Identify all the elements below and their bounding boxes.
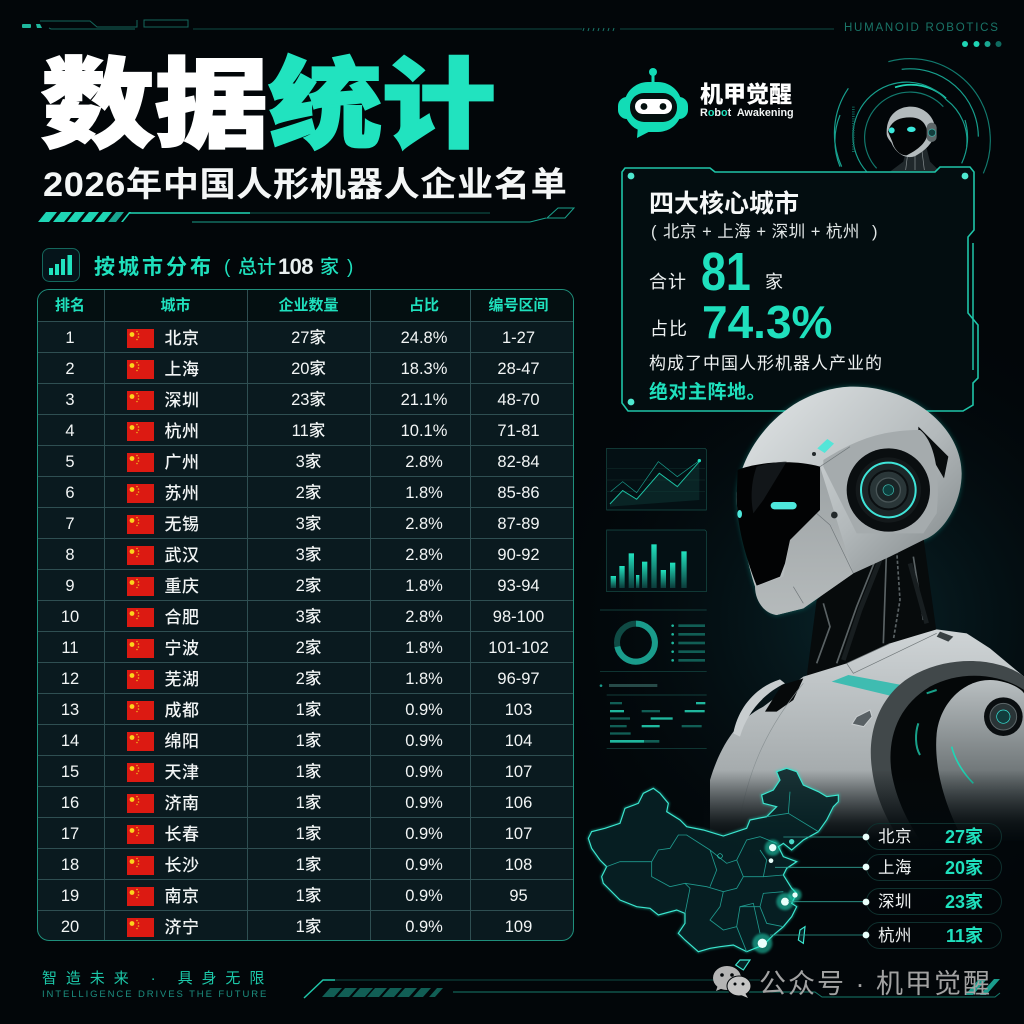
share label: 占比 — [650, 319, 688, 339]
watermark — [713, 966, 992, 999]
legend 深圳 — [866, 888, 1002, 915]
row 19 — [38, 880, 573, 911]
row 16: 1家 — [296, 794, 321, 812]
row 4: 杭州 — [164, 422, 200, 441]
row 5: 5 — [65, 453, 75, 471]
legend 杭州: 11家 — [946, 926, 983, 946]
row 13 — [38, 694, 573, 725]
row 7 — [38, 508, 573, 539]
legend 深圳: 23家 — [945, 892, 983, 912]
icon: robot logo — [618, 68, 688, 138]
row 15 — [38, 756, 573, 787]
row 6 — [38, 477, 573, 508]
heading total — [224, 254, 353, 279]
row 3: 21.1% — [401, 391, 447, 409]
row 8: 2.8% — [405, 546, 443, 564]
icon: bar chart — [42, 248, 80, 282]
row 11: 11 — [61, 639, 79, 657]
row 12: 1.8% — [405, 670, 443, 688]
label: humanoid robotics: HUMANOID ROBOTICS — [844, 22, 1000, 34]
section heading: by city — [42, 248, 353, 282]
row 12 — [38, 663, 573, 694]
row 1 — [38, 322, 573, 353]
legend 上海: 20家 — [945, 858, 983, 878]
slogan: 智造未来 · 具身无限 — [42, 970, 273, 987]
row 15: 15 — [61, 763, 79, 781]
title underline decoration — [38, 208, 575, 222]
panel: core cities — [621, 166, 979, 412]
row 1: 1 — [65, 329, 75, 347]
row 17: 1家 — [296, 825, 321, 843]
panel frame — [621, 166, 979, 412]
row 20: 109 — [505, 918, 532, 936]
table header — [38, 290, 573, 322]
row 14: 104 — [505, 732, 532, 750]
total label: 合计 — [649, 272, 687, 292]
row 19: 0.9% — [405, 887, 443, 905]
mini charts — [600, 448, 707, 749]
row 14: 绵阳 — [164, 732, 200, 751]
total number: 81 — [701, 242, 751, 302]
footer decoration — [304, 979, 1000, 998]
row 9: 1.8% — [405, 577, 443, 595]
row 18: 长沙 — [164, 856, 200, 875]
row 13: 13 — [61, 701, 79, 719]
robot glow — [737, 387, 962, 615]
row 8: 8 — [65, 546, 75, 564]
row 6: 1.8% — [405, 484, 443, 502]
row 4 — [38, 415, 573, 446]
donut chart — [600, 610, 707, 672]
row 9: 2家 — [296, 577, 321, 595]
row 11: 2家 — [296, 639, 321, 657]
row 8: 武汉 — [164, 546, 200, 565]
row 7: 无锡 — [164, 515, 200, 534]
table header: 编号区间 — [488, 297, 548, 314]
legend 上海 — [866, 854, 1002, 881]
icon: wechat — [713, 966, 750, 998]
row 7: 87-89 — [497, 515, 540, 533]
row 16 — [38, 787, 573, 818]
row 8 — [38, 539, 573, 570]
row 3 — [38, 384, 573, 415]
logo subtitle: Robot Awakening — [700, 107, 794, 119]
row 11 — [38, 632, 573, 663]
row 5: 3家 — [296, 453, 321, 471]
row 9: 重庆 — [164, 577, 200, 596]
row 8: 3家 — [296, 546, 321, 564]
line chart — [607, 448, 706, 510]
row 10: 98-100 — [493, 608, 544, 626]
row 2: 28-47 — [497, 360, 540, 378]
row 13: 1家 — [296, 701, 321, 719]
row 10: 2.8% — [405, 608, 443, 626]
panel city list: ) — [872, 223, 878, 241]
row 20 — [61, 918, 532, 937]
row 1: 1-27 — [502, 329, 535, 347]
legend 北京: 北京 — [878, 828, 912, 846]
row 11: 1.8% — [405, 639, 443, 657]
row 2: 18.3% — [401, 360, 447, 378]
heading total: ( — [224, 257, 230, 278]
row 12: 12 — [61, 670, 79, 688]
share number: 74.3% — [702, 296, 832, 348]
row 16: 16 — [61, 794, 79, 812]
legend 北京 — [866, 823, 1002, 850]
row 18: 0.9% — [405, 856, 443, 874]
row 1: 27家 — [291, 329, 326, 347]
row 20: 20 — [61, 918, 79, 936]
row 1: 北京 — [164, 329, 200, 348]
row 12: 芜湖 — [164, 670, 200, 689]
row 18 — [38, 849, 573, 880]
row 17: 0.9% — [405, 825, 443, 843]
row 13: 103 — [505, 701, 532, 719]
small robot with rings — [834, 58, 991, 174]
row 4: 71-81 — [497, 422, 540, 440]
row 16: 0.9% — [405, 794, 443, 812]
row 2 — [38, 353, 573, 384]
row 16: 106 — [505, 794, 532, 812]
panel highlight: 绝对主阵地。 — [649, 382, 766, 403]
panel description: 构成了中国人形机器人产业的 — [649, 354, 883, 373]
panel city list: 北京 + 上海 + 深圳 + 杭州 — [663, 223, 860, 241]
row 20: 0.9% — [405, 918, 443, 936]
row 5: 广州 — [164, 453, 200, 472]
row 7: 3家 — [296, 515, 321, 533]
robot shoulder joint — [871, 661, 1024, 840]
row 17 — [38, 818, 573, 849]
city legend — [862, 823, 1002, 949]
slogan english: INTELLIGENCE DRIVES THE FUTURE — [42, 989, 268, 1000]
table header: 排名 — [55, 297, 85, 314]
logo name: 机甲觉醒 — [700, 81, 792, 107]
row 17: 长春 — [164, 825, 200, 844]
row 15: 0.9% — [405, 763, 443, 781]
row 20: 1家 — [296, 918, 321, 936]
logo — [618, 68, 794, 138]
row 7: 2.8% — [405, 515, 443, 533]
heading total: 总计 — [238, 257, 276, 278]
robot torso — [710, 629, 1024, 840]
row 15: 天津 — [164, 763, 200, 782]
row 2: 20家 — [291, 360, 326, 378]
legend 深圳: 深圳 — [878, 893, 912, 911]
row 6: 6 — [65, 484, 75, 502]
legend 杭州 — [866, 922, 1002, 949]
row 6: 2家 — [296, 484, 321, 502]
robot neck — [807, 537, 937, 677]
row 20: 济宁 — [164, 918, 200, 937]
table: city distribution — [37, 289, 574, 941]
row 17: 107 — [505, 825, 532, 843]
row 5: 2.8% — [405, 453, 443, 471]
row 12: 2家 — [296, 670, 321, 688]
row 1: 24.8% — [401, 329, 447, 347]
row 18: 18 — [61, 856, 79, 874]
row 9: 93-94 — [497, 577, 540, 595]
table header: 占比 — [409, 297, 439, 314]
row 3: 48-70 — [497, 391, 540, 409]
total unit: 家 — [765, 272, 783, 292]
row 5: 82-84 — [497, 453, 540, 471]
row 10 — [38, 601, 573, 632]
row 14 — [38, 725, 573, 756]
row 10: 3家 — [296, 608, 321, 626]
row 18: 108 — [505, 856, 532, 874]
row 13: 0.9% — [405, 701, 443, 719]
legend 杭州: 杭州 — [878, 927, 912, 945]
row 19: 19 — [61, 887, 79, 905]
row 10: 合肥 — [164, 608, 200, 627]
heading total: 108 — [278, 254, 313, 279]
row 19: 1家 — [296, 887, 321, 905]
row 6: 苏州 — [164, 484, 200, 503]
row 8: 90-92 — [497, 546, 540, 564]
row 4: 10.1% — [401, 422, 447, 440]
china map — [586, 766, 863, 971]
row 15: 107 — [505, 763, 532, 781]
table header: 企业数量 — [278, 297, 338, 314]
row 16: 济南 — [164, 794, 200, 813]
title: 数据统计 — [41, 50, 496, 160]
row 19: 南京 — [164, 887, 200, 906]
row 2: 2 — [65, 360, 75, 378]
panel city list: ( — [651, 223, 656, 241]
row 15: 1家 — [296, 763, 321, 781]
row 4: 11家 — [292, 422, 325, 440]
row 10: 10 — [61, 608, 79, 626]
heading text: 按城市分布 — [94, 256, 214, 279]
table header: 城市 — [160, 297, 190, 314]
watermark text: 公众号 · 机甲觉醒 — [759, 969, 992, 999]
row 2: 上海 — [164, 360, 200, 379]
row 11: 101-102 — [488, 639, 549, 657]
row 13: 成都 — [164, 701, 200, 720]
row 19: 95 — [509, 887, 528, 905]
row 4: 4 — [65, 422, 75, 440]
row 17: 17 — [61, 825, 79, 843]
row 3: 深圳 — [164, 391, 200, 410]
row 11: 宁波 — [164, 639, 200, 658]
heading total: 家 — [320, 257, 339, 278]
row 5 — [38, 446, 573, 477]
row 3: 3 — [65, 391, 75, 409]
subtitle: 2026年中国人形机器人企业名单 — [43, 166, 567, 204]
bar chart — [607, 530, 706, 592]
row 14: 14 — [61, 732, 79, 750]
row 12: 96-97 — [497, 670, 540, 688]
row 9: 9 — [65, 577, 75, 595]
robot helmet — [737, 387, 962, 615]
row 9 — [38, 570, 573, 601]
legend 北京: 27家 — [945, 827, 983, 847]
row 18: 1家 — [296, 856, 321, 874]
row 7: 7 — [65, 515, 75, 533]
legend 上海: 上海 — [878, 859, 912, 877]
row 3: 23家 — [291, 391, 326, 409]
panel heading: 四大核心城市 — [649, 190, 799, 218]
row 6: 85-86 — [497, 484, 540, 502]
row 14: 0.9% — [405, 732, 443, 750]
heading total: ) — [347, 257, 353, 278]
gantt chart — [600, 684, 707, 748]
top decoration — [22, 20, 1002, 47]
row 14: 1家 — [296, 732, 321, 750]
robot illustration — [710, 384, 1024, 834]
